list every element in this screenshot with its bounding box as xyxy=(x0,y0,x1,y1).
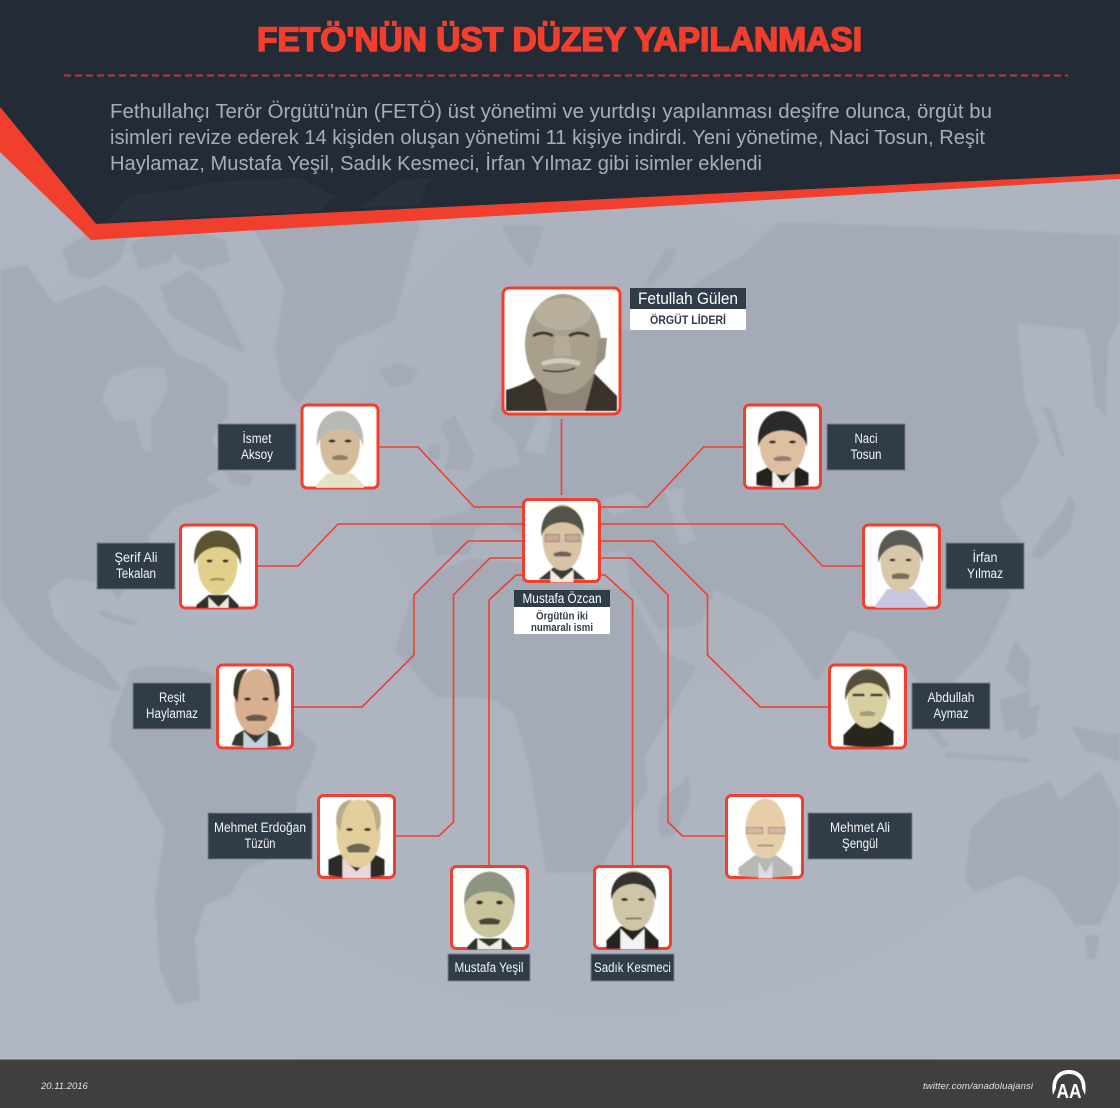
person: Şerif Ali Tekalan xyxy=(97,525,256,608)
person: Mustafa Özcan: Mustafa Özcan xyxy=(522,591,602,606)
photo: İsmet Aksoy xyxy=(302,405,378,488)
person: İsmet Aksoy: İsmet xyxy=(242,431,272,446)
intro text xyxy=(110,100,992,175)
map: North America xyxy=(0,265,228,690)
role label: ÖRGÜT LİDERİ xyxy=(630,309,746,330)
name label: İrfan Yılmaz xyxy=(946,543,1024,589)
person: Sadık Kesmeci: Sadık Kesmeci xyxy=(594,960,671,975)
icon: AA logo: AA xyxy=(1056,1081,1082,1103)
name label: Fetullah Gülen xyxy=(630,288,746,309)
map: Eurasia xyxy=(430,222,1120,725)
map: Madagascar xyxy=(657,775,690,837)
map: Australia xyxy=(965,770,1120,925)
person: Mustafa Özcan xyxy=(514,500,610,634)
person: İsmet Aksoy xyxy=(218,405,378,488)
person: Reşit Haylamaz xyxy=(133,665,292,748)
photo: Fetullah Gülen xyxy=(503,288,620,414)
connector lines xyxy=(257,419,863,866)
map: South America xyxy=(110,665,317,1005)
photo: Mehmet Ali Şengül xyxy=(726,796,802,878)
name label: Şerif Ali Tekalan xyxy=(97,543,175,589)
person: Mehmet Ali Şengül: Mehmet Ali xyxy=(830,820,890,835)
person: İrfan Yılmaz xyxy=(864,525,1024,608)
photo: Mustafa Özcan xyxy=(524,500,600,582)
map: Caspian Sea xyxy=(665,488,697,545)
person: Abdullah Aymaz: Aymaz xyxy=(934,706,969,721)
photo: Mustafa Yeşil xyxy=(452,866,528,950)
person: Fetullah Gülen: Fetullah Gülen xyxy=(638,290,738,308)
person: Mehmet Ali Şengül xyxy=(726,796,912,878)
name label: Mustafa Yeşil xyxy=(448,954,530,981)
person: Naci Tosun: Tosun xyxy=(850,447,882,462)
person: Mustafa Özcan: Örgütün iki xyxy=(536,610,588,622)
person: Naci Tosun: Naci xyxy=(854,431,878,446)
name label: Naci Tosun xyxy=(827,424,905,470)
name label: Sadık Kesmeci xyxy=(591,954,674,981)
person: Şerif Ali Tekalan: Tekalan xyxy=(116,566,156,581)
role label: Örgütün iki numaralı ismi xyxy=(514,607,610,634)
source: twitter.com/anadoluajansi xyxy=(923,1081,1034,1092)
photo: Sadık Kesmeci xyxy=(594,866,670,950)
name label: Mustafa Özcan xyxy=(514,590,610,607)
map: Arctic islands xyxy=(62,225,246,353)
person: Mustafa Özcan: numaralı ismi xyxy=(531,622,593,634)
person: Mehmet Erdoğan Tüzün xyxy=(208,796,394,878)
footer xyxy=(0,1059,1120,1108)
name label: Mehmet Ali Şengül xyxy=(808,813,912,859)
person: Sadık Kesmeci xyxy=(591,866,674,981)
person: Abdullah Aymaz xyxy=(830,665,990,748)
intro text: isimleri revize ederek 14 kişiden oluşan yönetimi 11 kişiye indirdi. Yeni yönetime, Naci Tosun, Reşit xyxy=(110,126,985,149)
person: Fetullah Gülen xyxy=(503,288,746,414)
photo: Naci Tosun xyxy=(744,405,820,488)
person: Mehmet Ali Şengül: Şengül xyxy=(842,836,878,851)
person: Mustafa Yeşil: Mustafa Yeşil xyxy=(454,960,524,975)
person: Reşit Haylamaz: Reşit xyxy=(159,690,185,705)
person: Reşit Haylamaz: Haylamaz xyxy=(146,706,198,721)
person: İrfan Yılmaz: Yılmaz xyxy=(967,566,1003,581)
icon: AA logo xyxy=(1052,1070,1086,1103)
person: İrfan Yılmaz: İrfan xyxy=(972,550,998,565)
person: Abdullah Aymaz: Abdullah xyxy=(928,690,974,705)
photo: Abdullah Aymaz xyxy=(830,665,906,748)
photo: Mehmet Erdoğan Tüzün xyxy=(318,796,394,878)
intro text: Fethullahçı Terör Örgütü'nün (FETÖ) üst yönetimi ve yurtdışı yapılanması deşifre olunca, örgüt bu xyxy=(110,100,992,123)
map: Black Sea xyxy=(602,492,645,515)
person: Şerif Ali Tekalan: Şerif Ali xyxy=(114,550,158,565)
person: Mustafa Yeşil xyxy=(448,866,530,981)
photo: İrfan Yılmaz xyxy=(864,525,940,608)
red band xyxy=(0,107,1120,240)
person: Mehmet Erdoğan Tüzün: Tüzün xyxy=(244,836,276,851)
photo: Şerif Ali Tekalan xyxy=(180,525,256,608)
person: İsmet Aksoy: Aksoy xyxy=(241,447,273,462)
map: faint land under header xyxy=(108,178,430,221)
intro text: Haylamaz, Mustafa Yeşil, Sadık Kesmeci, İrfan Yılmaz gibi isimler eklendi xyxy=(110,152,762,175)
photo: Reşit Haylamaz xyxy=(218,665,292,748)
date: 20.11.2016 xyxy=(40,1081,89,1092)
name label: Mehmet Erdoğan Tüzün xyxy=(208,813,312,859)
name label: Abdullah Aymaz xyxy=(912,683,990,729)
person: Mehmet Erdoğan Tüzün: Mehmet Erdoğan xyxy=(214,820,306,835)
map: Africa xyxy=(395,558,696,873)
title: FETÖ'NÜN ÜST DÜZEY YAPILANMASI xyxy=(257,21,862,59)
name label: Reşit Haylamaz xyxy=(133,683,211,729)
map: Greenland xyxy=(250,222,420,405)
map: Baltic Sea xyxy=(525,400,555,455)
person: Naci Tosun xyxy=(744,405,905,488)
map: islands xyxy=(98,225,1120,960)
map: Hudson Bay xyxy=(102,368,168,453)
name label: İsmet Aksoy xyxy=(218,424,296,470)
header panel xyxy=(0,0,1120,240)
person: Fetullah Gülen: ÖRGÜT LİDERİ xyxy=(650,312,726,327)
